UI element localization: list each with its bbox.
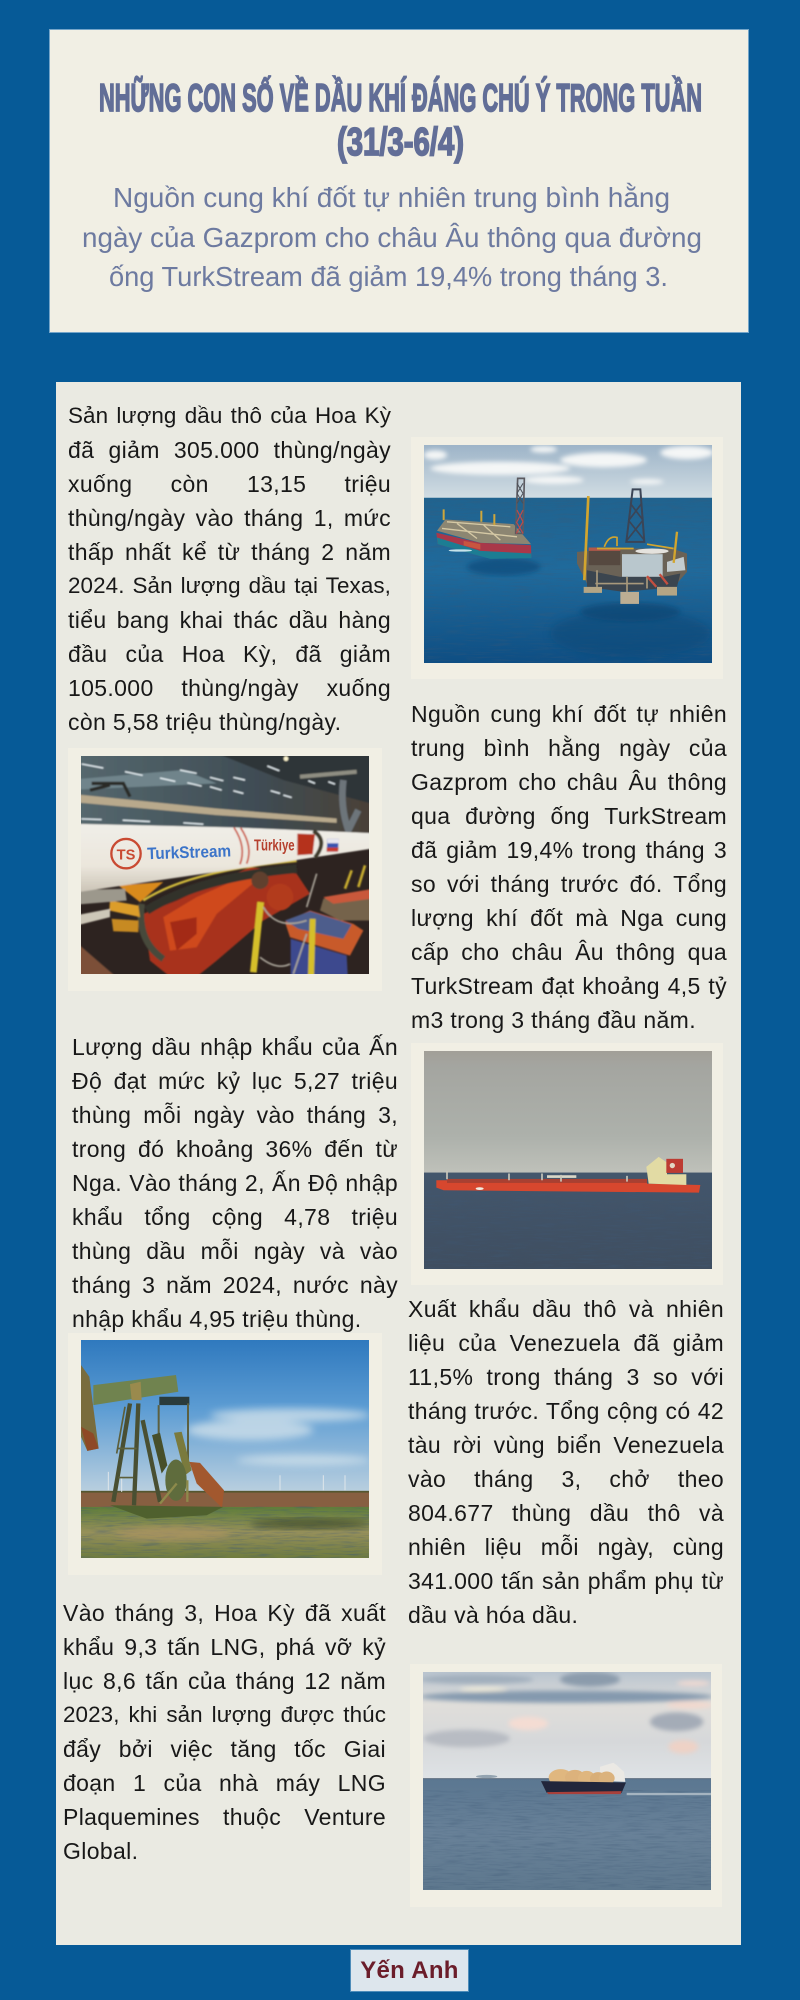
text block: TurkStream gas supply: m3 trong 3 tháng đầu năm.	[411, 1007, 696, 1033]
photo: TurkStream pipeline: TurkStream	[147, 841, 231, 863]
subtitle: Nguồn cung khí đốt tự nhiên trung bình hằng	[113, 182, 670, 213]
red machine	[143, 867, 310, 987]
text block: US LNG exports: đoạn 1 của nhà máy LNG	[63, 1770, 386, 1796]
text block: Venezuela exports: 11,5% trong tháng 3 so với	[408, 1364, 724, 1390]
text block: India oil imports	[72, 1034, 398, 1332]
text block: TurkStream gas supply: so với tháng trước đó. Tổng	[411, 871, 727, 897]
text block: TurkStream gas supply	[411, 701, 727, 1033]
platform	[626, 489, 644, 542]
text block: Venezuela exports: vào tháng 3, chở theo	[408, 1466, 724, 1492]
photo: pumpjack	[81, 1340, 369, 1558]
text block: US LNG exports: Global.	[63, 1838, 138, 1864]
photo frame: TurkStream pipeline	[68, 748, 382, 991]
text block: India oil imports: Lượng dầu nhập khẩu của Ấn	[72, 1034, 398, 1060]
text block: US LNG exports: Vào tháng 3, Hoa Kỳ đã xuất	[63, 1600, 386, 1626]
text block: TurkStream gas supply: trung bình hằng ngày của	[411, 735, 727, 761]
panel: header	[50, 30, 748, 332]
FPSO	[437, 519, 531, 544]
text block: Venezuela exports: tháng trước. Tổng cộng có 42	[408, 1398, 724, 1424]
text block: US crude output	[68, 403, 391, 735]
text block: US crude output: xuống còn 13,15 triệu	[68, 471, 391, 497]
text block: Venezuela exports: 804.677 thùng dầu thô và	[408, 1500, 724, 1526]
text block: Venezuela exports: nhiên liệu mỗi ngày, cùng	[408, 1534, 724, 1560]
text block: Venezuela exports: dầu và hóa dầu.	[408, 1602, 578, 1628]
byline badge	[351, 1950, 468, 1991]
text block: TurkStream gas supply: Gazprom cho châu Âu thông	[411, 769, 727, 795]
photo frame: LNG carrier	[410, 1664, 722, 1907]
text block: US LNG exports	[63, 1600, 386, 1864]
subtitle: ống TurkStream đã giảm 19,4% trong tháng 3.	[109, 261, 668, 292]
text block: TurkStream gas supply: TurkStream đạt khoảng 4,5 tỷ	[411, 973, 727, 999]
bin	[285, 910, 363, 956]
text block: US LNG exports: lục 8,6 tấn của tháng 12 năm	[63, 1668, 386, 1694]
text block: Venezuela exports: tàu rời vùng biển Venezuela	[408, 1432, 724, 1458]
text block: US crude output: 105.000 thùng/ngày xuống	[68, 675, 391, 701]
byline badge: Yến Anh	[360, 1957, 459, 1984]
text block: US LNG exports: đẩy bởi việc tăng tốc Giai	[63, 1736, 386, 1762]
text block: India oil imports: Độ đạt mức kỷ lục 5,27 triệu	[72, 1068, 398, 1094]
pipe	[67, 824, 383, 894]
panel: main content	[56, 382, 741, 1945]
text block: Venezuela exports: 341.000 tấn sản phẩm phụ từ	[408, 1568, 724, 1594]
text block: US crude output: Sản lượng dầu thô của Hoa Kỳ	[68, 403, 391, 428]
photo: TurkStream pipeline: TS	[117, 848, 136, 864]
text block: TurkStream gas supply: lượng khí đốt mà Nga cung	[411, 905, 727, 931]
text block: TurkStream gas supply: Nguồn cung khí đốt tự nhiên	[411, 701, 727, 727]
title	[99, 75, 702, 164]
text block: India oil imports: Nga. Vào tháng 2, Ấn Độ nhập	[72, 1170, 398, 1196]
text block: US LNG exports: Plaquemines thuộc Venture	[63, 1804, 386, 1830]
text block: India oil imports: thùng mỗi ngày vào tháng 3,	[72, 1102, 398, 1128]
text block: Venezuela exports: Xuất khẩu dầu thô và nhiên	[408, 1296, 724, 1322]
text block: US LNG exports: 2023, khi sản lượng được thúc	[63, 1702, 386, 1727]
text block: TurkStream gas supply: đã giảm 19,4% trong tháng 3	[411, 837, 727, 863]
text block: US crude output: thấp nhất kể từ tháng 2 năm	[68, 539, 391, 565]
text block: India oil imports: khẩu tổng cộng 4,78 triệu	[72, 1204, 398, 1230]
title: (31/3-6/4)	[337, 121, 464, 164]
text block: Venezuela exports: liệu của Venezuela đã giảm	[408, 1330, 724, 1356]
text block: US crude output: thùng/ngày vào tháng 1, mức	[68, 505, 391, 531]
subtitle: ngày của Gazprom cho châu Âu thông qua đường	[82, 222, 702, 253]
photo: TurkStream pipeline	[81, 756, 369, 974]
photo: TurkStream pipeline: Türkiye	[254, 837, 295, 854]
photo: offshore platform	[424, 445, 712, 663]
text block: TurkStream gas supply: qua đường ống TurkStream	[411, 803, 727, 829]
text block: India oil imports: nhập khẩu 4,95 triệu thùng.	[72, 1306, 362, 1332]
photo frame: offshore platform	[411, 437, 723, 679]
text block: India oil imports: tháng 3 năm 2024, nước này	[72, 1272, 398, 1298]
text block: TurkStream gas supply: cấp cho châu Âu thông qua	[411, 939, 727, 965]
text block: India oil imports: thùng dầu mỗi ngày và vào	[72, 1238, 398, 1264]
text block: US LNG exports: khẩu 9,3 tấn LNG, phá vỡ kỷ	[63, 1634, 386, 1660]
photo: LNG carrier	[423, 1672, 711, 1890]
subtitle	[82, 182, 702, 292]
text block: US crude output: đầu của Hoa Kỳ, đã giảm	[68, 641, 391, 667]
text block: India oil imports: trong đó khoảng 36% đến từ	[72, 1136, 398, 1162]
text block: US crude output: 2024. Sản lượng dầu tại Texas,	[68, 573, 391, 598]
text block: US crude output: đã giảm 305.000 thùng/ngày	[68, 437, 391, 463]
text block: US crude output: còn 5,58 triệu thùng/ngày.	[68, 709, 341, 735]
photo frame: red tanker	[411, 1043, 723, 1285]
text block: US crude output: tiểu bang khai thác dầu hàng	[68, 607, 391, 633]
text block: Venezuela exports	[408, 1296, 724, 1628]
photo: red tanker	[424, 1051, 712, 1269]
photo frame: pumpjack	[68, 1333, 382, 1575]
